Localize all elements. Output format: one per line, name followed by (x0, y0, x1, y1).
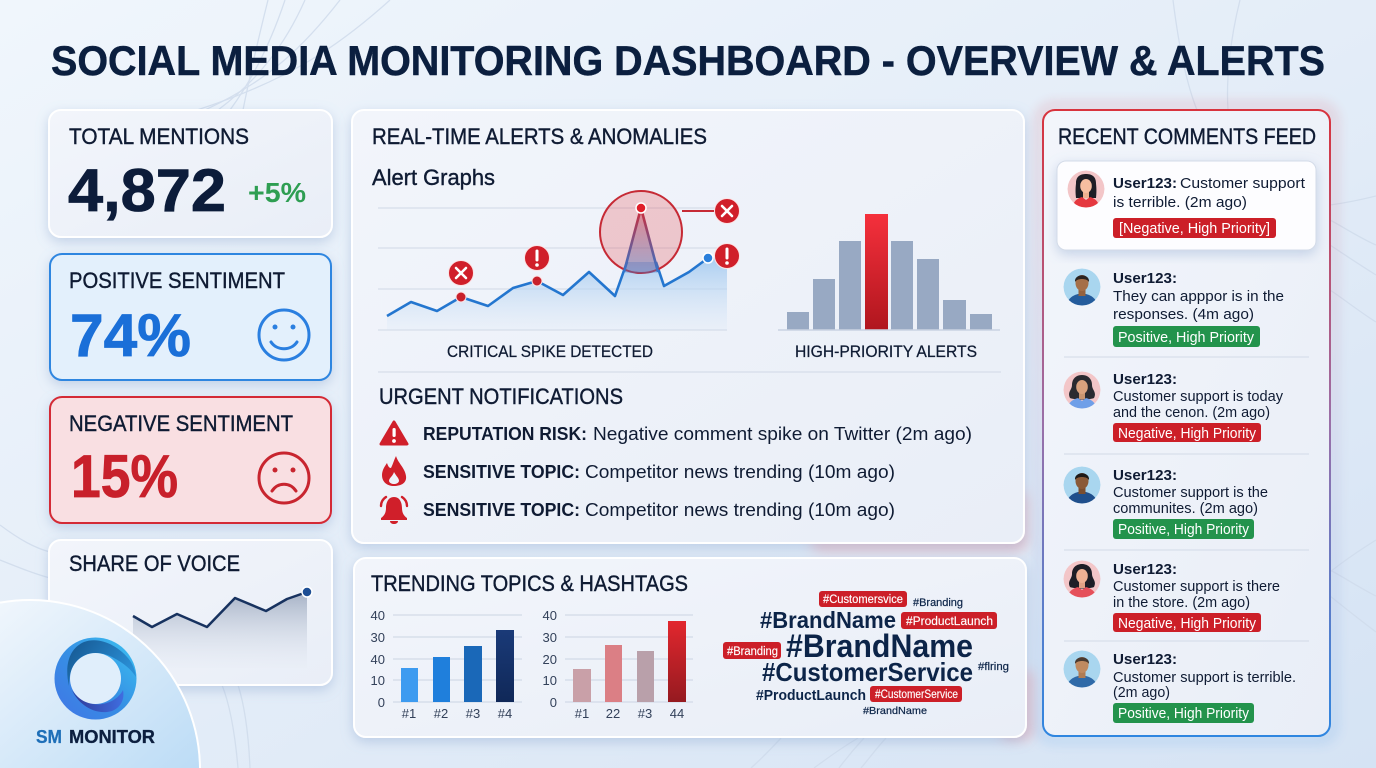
text: competitor news repeat (423, 499, 895, 520)
label: critical spike detected: CRITICAL SPIKE DETECTED (447, 342, 653, 361)
text: SM Monitor: MONITOR (69, 727, 155, 747)
text: competitor news (423, 461, 895, 482)
icon: alert exclamation badge (524, 246, 550, 270)
text: comment two (1113, 270, 1284, 323)
chart: red bars: 20 (543, 652, 557, 667)
panel: trending topics (354, 558, 1026, 737)
title: SOCIAL MEDIA MONITORING DASHBOARD - OVERVIEW & ALERTS (51, 37, 1325, 84)
icon: flame (382, 456, 406, 486)
chart: red bars: 22 (606, 706, 620, 721)
panel: positive sentiment (50, 254, 331, 380)
panel glow: alerts (810, 490, 1028, 552)
chart: blue bars: 40 (371, 652, 385, 667)
panel: share of voice (49, 540, 332, 685)
chart: share of voice line (133, 587, 312, 668)
text: competitor news repeat: Competitor news trending (10m ago) (585, 499, 895, 520)
chart: red bars: #1 (575, 706, 589, 721)
chart: blue bars: 0 (378, 695, 385, 710)
value: negative sentiment: 15% (71, 443, 178, 510)
chart: blue bars: #1 (402, 706, 416, 721)
panel: negative sentiment (50, 397, 331, 523)
text: comment one: is terrible. (2m ago) (1113, 194, 1247, 211)
panel: recent comments feed (1043, 110, 1330, 736)
text: comment six (1113, 651, 1296, 701)
text: comment two: responses. (4m ago) (1113, 306, 1254, 323)
chart: red bars (543, 608, 693, 721)
tag: positive high priority: Positive, High Priority (1118, 522, 1250, 538)
notification: reputation risk (381, 422, 972, 444)
label: high-priority alerts: HIGH-PRIORITY ALERTS (795, 342, 977, 361)
text: comment two: They can apppor is in the (1113, 288, 1284, 305)
heading: negative sentiment: NEGATIVE SENTIMENT (69, 411, 293, 436)
comment: sixth positive (1064, 650, 1296, 723)
text: comment four: Customer support is the (1113, 484, 1268, 501)
notification: competitor news (382, 456, 895, 486)
panel glow: trending (1000, 670, 1034, 740)
subheading: alert graphs: Alert Graphs (372, 165, 495, 190)
heading: share of voice: SHARE OF VOICE (69, 551, 240, 576)
tag: positive high priority: Positive, High Priority (1118, 330, 1255, 346)
word cloud: hashtags: #BrandName (786, 628, 973, 664)
icon: sad face (259, 453, 309, 503)
notification: competitor news repeat (381, 497, 895, 524)
heading: trending topics: TRENDING TOPICS & HASHTAGS (371, 571, 688, 596)
text: competitor news: SENSITIVE TOPIC: (423, 461, 580, 482)
icon: ring logo (54, 638, 136, 720)
heading: real-time alerts: REAL-TIME ALERTS & ANOMALIES (372, 124, 707, 149)
text: comment two: User123: (1113, 270, 1177, 287)
text: comment one (1113, 175, 1306, 211)
text: comment one: User123: (1113, 175, 1177, 192)
value: total mentions: 4,872 (68, 157, 226, 224)
word cloud: hashtags: #CustomerService (875, 689, 958, 701)
text: comment five: in the store. (2m ago) (1113, 594, 1250, 611)
word cloud: hashtags: #ProductLaunch (906, 616, 993, 628)
word cloud: hashtags: #Branding (913, 597, 963, 609)
chart: critical spike line (378, 191, 740, 330)
chart: blue bars (371, 608, 522, 721)
icon: avatar woman red (1068, 170, 1104, 208)
tag: negative high priority: Negative, High Priority (1118, 426, 1257, 442)
text: competitor news: Competitor news trending (10m ago) (585, 461, 895, 482)
text: comment five: Customer support is there (1113, 578, 1280, 595)
chart: red bars: #3 (638, 706, 652, 721)
chart: high-priority alerts bars (778, 214, 1000, 330)
logo badge: SM Monitor (0, 600, 200, 768)
text: comment three (1113, 371, 1283, 421)
text: SM Monitor: SM (36, 727, 62, 747)
text: comment three: Customer support is today (1113, 388, 1283, 405)
icon: spike x badge (714, 198, 740, 224)
chart: blue bars: #3 (466, 706, 480, 721)
comment: third negative (1064, 371, 1283, 442)
text: comment six: User123: (1113, 651, 1177, 668)
chart: blue bars: #2 (434, 706, 448, 721)
tag: positive high priority: Positive, High Priority (1118, 706, 1250, 722)
word cloud: hashtags: #BrandName (863, 705, 927, 717)
text: comment four: User123: (1113, 467, 1177, 484)
chart: blue bars: 40 (371, 608, 385, 623)
comment: first negative (1057, 161, 1316, 250)
panel glow: feed (1039, 106, 1334, 740)
icon: alert x badge (448, 260, 474, 286)
word cloud: hashtags: #BrandName (760, 607, 896, 633)
icon: avatar woman pink (1064, 560, 1100, 598)
word cloud: hashtags: #flring (978, 661, 1009, 673)
text: comment six: (2m ago) (1113, 684, 1170, 701)
word cloud: hashtags: #Customersvice (823, 594, 903, 606)
icon: end exclamation badge (714, 244, 740, 268)
change: plus five percent: +5% (248, 177, 306, 208)
icon: avatar man blue (1064, 268, 1100, 306)
text: comment three: and the cenon. (2m ago) (1113, 404, 1270, 421)
word cloud: hashtags: #CustomerService (762, 657, 973, 687)
icon: avatar woman blue (1064, 372, 1100, 409)
value: positive sentiment: 74% (70, 302, 191, 369)
icon: smiley face (259, 310, 309, 360)
chart: red bars: 10 (543, 673, 557, 688)
chart: blue bars: 30 (371, 630, 385, 645)
word cloud: hashtags: #Branding (727, 646, 778, 658)
text: reputation risk (423, 423, 972, 444)
text: comment one: Customer support (1180, 175, 1306, 192)
chart: blue bars: 10 (371, 673, 385, 688)
icon: avatar man light (1064, 650, 1100, 688)
text: comment four: communites. (2m ago) (1113, 500, 1258, 517)
chart: red bars: 30 (543, 630, 557, 645)
chart: red bars: 40 (543, 608, 557, 623)
comment: fourth positive (1064, 466, 1268, 539)
comment: second positive (1064, 268, 1284, 347)
icon: bell (381, 497, 407, 524)
panel: real-time alerts (352, 110, 1024, 543)
comment: fifth negative (1064, 560, 1280, 632)
panel: total mentions (49, 110, 332, 237)
chart: red bars: 44 (670, 706, 684, 721)
text: comment six: Customer support is terrible. (1113, 669, 1296, 686)
text: reputation risk: Negative comment spike on Twitter (2m ago) (593, 423, 972, 444)
heading: total mentions: TOTAL MENTIONS (69, 124, 249, 149)
heading: urgent notifications: URGENT NOTIFICATIONS (379, 384, 623, 409)
icon: warning triangle (381, 422, 407, 444)
text: comment five (1113, 561, 1280, 611)
tag: negative high priority: [Negative, High Priority] (1119, 221, 1270, 237)
text: competitor news repeat: SENSITIVE TOPIC: (423, 499, 580, 520)
text: comment four (1113, 467, 1268, 517)
text: comment five: User123: (1113, 561, 1177, 578)
chart: red bars: 0 (550, 695, 557, 710)
text: comment three: User123: (1113, 371, 1177, 388)
chart: blue bars: #4 (498, 706, 512, 721)
tag: negative high priority: Negative, High Priority (1118, 616, 1257, 632)
text: reputation risk: REPUTATION RISK: (423, 423, 587, 444)
heading: positive sentiment: POSITIVE SENTIMENT (69, 268, 285, 293)
word cloud: hashtags: #ProductLaunch (756, 687, 866, 704)
icon: avatar man dark (1064, 466, 1100, 504)
heading: recent comments feed: RECENT COMMENTS FEED (1058, 124, 1316, 149)
word cloud: hashtags (723, 591, 1009, 717)
